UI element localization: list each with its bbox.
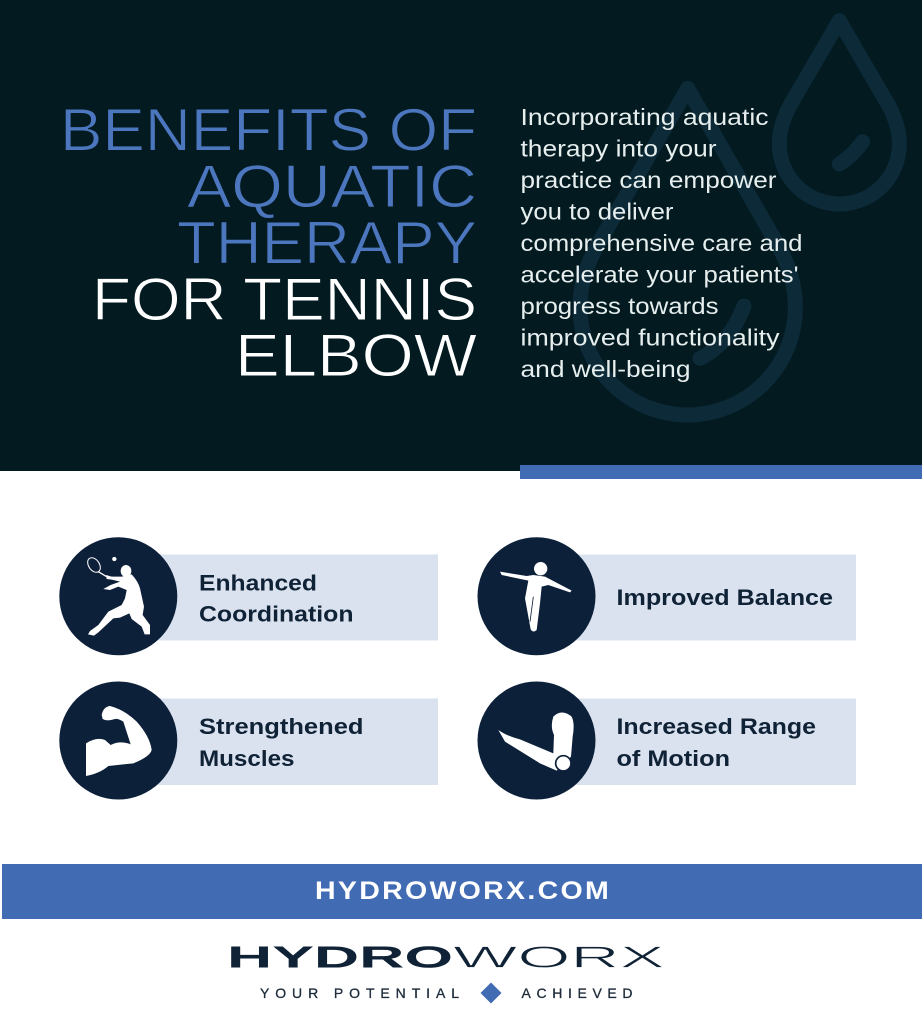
- wordmark: [227, 940, 666, 974]
- icon: balancing figure: [500, 562, 572, 632]
- title: FOR TENNIS: [92, 266, 477, 333]
- website banner: [2, 864, 922, 919]
- label: [616, 714, 816, 771]
- icon: bent arm with joint: [498, 712, 574, 771]
- benefit: strengthened muscles: [59, 682, 438, 800]
- label: Enhanced: [199, 570, 317, 596]
- benefit: enhanced coordination: [59, 537, 438, 655]
- intro text: you to deliver: [520, 198, 674, 224]
- benefit: improved balance: [478, 537, 856, 655]
- wordmark: HYDRO: [227, 940, 453, 974]
- wordmark: WORX: [453, 940, 666, 974]
- label: [199, 570, 354, 626]
- title: BENEFITS OF: [60, 97, 477, 164]
- intro text: Incorporating aquatic: [520, 104, 768, 130]
- icon: diamond: [480, 982, 502, 1004]
- icon: tennis player: [85, 555, 150, 636]
- label: Strengthened: [199, 714, 364, 739]
- intro text: accelerate your patients': [520, 262, 798, 288]
- title: AQUATIC: [187, 153, 477, 220]
- intro text: therapy into your: [520, 136, 717, 162]
- website banner: HYDROWORX.COM: [315, 877, 611, 905]
- tagline: ACHIEVED: [522, 985, 632, 1001]
- title: THERAPY: [177, 210, 477, 276]
- intro text: comprehensive care and: [520, 230, 802, 256]
- title: ELBOW: [235, 322, 477, 389]
- intro text: progress towards: [520, 293, 718, 319]
- benefit: increased range of motion: [478, 682, 856, 800]
- icon: water drops: [580, 21, 899, 415]
- label: Coordination: [199, 602, 354, 626]
- accent bar: [520, 465, 922, 479]
- header panel: [0, 0, 922, 471]
- intro text: practice can empower: [520, 167, 777, 193]
- tagline: YOUR POTENTIAL: [260, 985, 459, 1001]
- label: [199, 714, 364, 771]
- intro text: and well-being: [520, 356, 690, 382]
- icon: flexed bicep: [86, 706, 152, 776]
- tagline: [260, 985, 632, 1001]
- logo: [227, 940, 666, 1004]
- label: of Motion: [616, 746, 730, 771]
- label: Increased Range: [616, 714, 816, 739]
- label: Improved Balance: [616, 585, 833, 610]
- label: Muscles: [199, 746, 294, 771]
- intro text: improved functionality: [520, 324, 780, 350]
- title: [60, 97, 477, 389]
- intro text: [520, 104, 802, 382]
